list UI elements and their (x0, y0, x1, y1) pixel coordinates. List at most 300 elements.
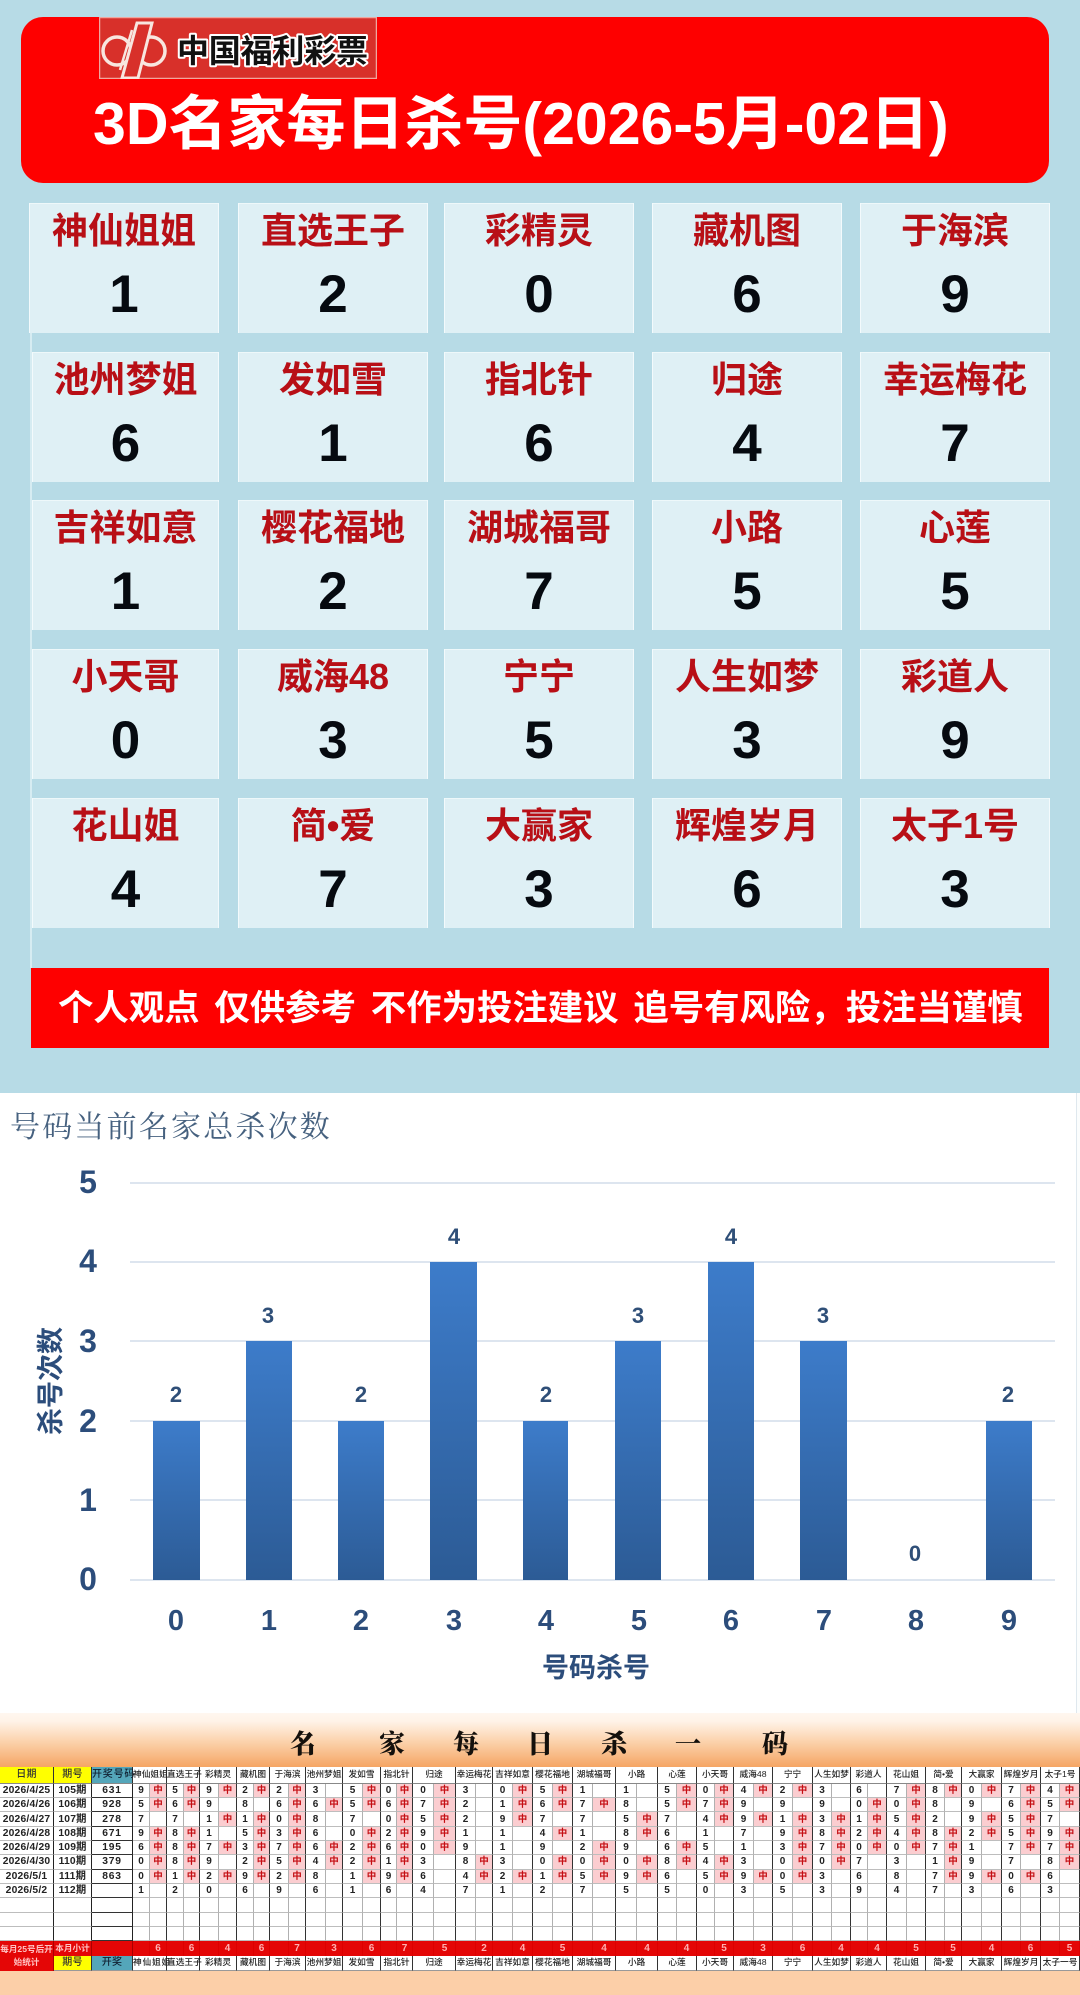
card: 大赢家 (444, 798, 634, 928)
bottom label row: 心莲 (668, 1957, 686, 1967)
row 105: 6 (856, 1785, 862, 1796)
row 111: 中 (187, 1871, 196, 1882)
card: 大赢家: 大赢家 (485, 805, 593, 846)
monthly subtotal row: 5 (442, 1943, 447, 1954)
header row: 樱花福地 (535, 1769, 570, 1779)
card: 宁宁: 宁宁 (503, 656, 575, 697)
row 107: 2026/4/27 (3, 1814, 50, 1824)
row 110: 8 (664, 1856, 670, 1867)
row 106: 5 (138, 1799, 144, 1810)
header row: 辉煌岁月 (1004, 1769, 1038, 1779)
row 105: 中 (719, 1785, 729, 1796)
card: 人生如梦: 3 (732, 711, 762, 770)
row 108: 2 (856, 1828, 862, 1839)
y axis labels: 1 (79, 1482, 97, 1518)
row 109: 中 (400, 1842, 409, 1853)
bar value labels: 0 (909, 1541, 921, 1566)
card: 发如雪: 发如雪 (279, 359, 387, 400)
card: 藏机图: 藏机图 (693, 210, 801, 251)
row 105: 4 (741, 1785, 746, 1796)
row 110: 3 (420, 1856, 426, 1867)
row 106: 8 (623, 1799, 629, 1810)
table heading: 杀 (601, 1725, 630, 1761)
row 105: 5 (540, 1785, 545, 1796)
row 107: 9 (969, 1814, 974, 1824)
row 108: 5 (242, 1828, 248, 1839)
row 108: 中 (987, 1828, 996, 1839)
row 106: 中 (872, 1799, 882, 1810)
x axis labels: 3 (446, 1605, 462, 1637)
row 109: 7 (819, 1842, 825, 1853)
monthly subtotal row: 6 (1028, 1943, 1033, 1954)
row 108: 1 (580, 1828, 585, 1839)
header row (0, 1767, 1080, 1971)
row 108: 9 (780, 1828, 785, 1839)
row 111: 中 (642, 1871, 652, 1882)
row 110: 8 (1047, 1856, 1053, 1867)
table section background (0, 1713, 1080, 1995)
row 106: 6 (172, 1799, 178, 1810)
row 108: 9 (420, 1828, 426, 1839)
row 109: 3 (780, 1842, 785, 1853)
bottom label row: 威海48 (739, 1957, 767, 1967)
row 107: 3 (819, 1814, 825, 1824)
row 110: 中 (948, 1856, 958, 1867)
row 110: 中 (187, 1856, 196, 1867)
card: 吉祥如意: 吉祥如意 (53, 507, 198, 548)
card: 樱花福地: 2 (318, 562, 348, 621)
bottom label row: 花山姐 (893, 1957, 919, 1967)
card: 小天哥 (32, 649, 219, 779)
row 106: 中 (1065, 1799, 1074, 1810)
row 110 (0, 1855, 1080, 1870)
row 111: 中 (479, 1871, 489, 1882)
decorative edge lines beside first column (30, 333, 32, 968)
card: 简•爱: 7 (318, 860, 348, 919)
row 106: 7 (420, 1799, 426, 1810)
row 105: 中 (798, 1785, 807, 1796)
header row: 人生如梦 (814, 1769, 849, 1779)
row 107: 中 (987, 1814, 996, 1824)
bottom label row: 彩精灵 (205, 1957, 231, 1967)
row 107: 278 (102, 1814, 122, 1824)
row 105: 中 (440, 1785, 449, 1796)
row 106: 9 (969, 1799, 974, 1810)
row 105: 1 (580, 1785, 585, 1796)
row 111: 1 (172, 1871, 178, 1882)
row 110: 中 (642, 1856, 652, 1867)
row 110: 中 (367, 1856, 376, 1867)
row 109: 6 (664, 1842, 670, 1853)
bottom label row: 指北针 (383, 1957, 410, 1967)
row 112: 3 (819, 1885, 825, 1896)
header row: 始统计 (14, 1957, 39, 1967)
card: 威海48 (238, 649, 428, 779)
card: 彩道人: 彩道人 (901, 656, 1009, 697)
row 106: 6 (540, 1799, 545, 1810)
row 109: 中 (1026, 1842, 1035, 1853)
row 109: 109期 (58, 1842, 87, 1853)
row 106: 中 (153, 1799, 163, 1810)
row 106: 106期 (58, 1799, 87, 1810)
row 105 (0, 1784, 1080, 1798)
header row: 指北针 (383, 1769, 410, 1779)
card: 小天哥: 小天哥 (71, 656, 180, 697)
header row: 期号 (62, 1769, 83, 1780)
row 108: 中 (872, 1828, 882, 1839)
row 108: 0 (350, 1828, 355, 1839)
row 106: 9 (780, 1799, 785, 1810)
row 107: 中 (257, 1814, 266, 1824)
row 111: 1 (540, 1871, 545, 1882)
row 106: 0 (856, 1799, 862, 1810)
row 111: 0 (138, 1871, 144, 1882)
x axis labels: 4 (538, 1605, 554, 1637)
monthly subtotal row: 5 (1067, 1943, 1072, 1954)
row 110: 中 (798, 1856, 807, 1867)
y axis title: 杀号次数 (36, 1327, 66, 1435)
row 108: 中 (1026, 1828, 1035, 1839)
row 107: 中 (518, 1814, 527, 1824)
row 106: 中 (682, 1799, 691, 1810)
card: 直选王子: 2 (318, 265, 348, 324)
row 105: 7 (894, 1785, 899, 1796)
row 108 (0, 1827, 1080, 1841)
row 105: 9 (138, 1785, 144, 1796)
row 107: 9 (500, 1814, 505, 1824)
row 110: 8 (463, 1856, 468, 1867)
row 110: 0 (780, 1856, 785, 1867)
row 109: 7 (1008, 1842, 1014, 1853)
monthly subtotal row: 5 (721, 1943, 727, 1954)
row 106: 5 (1047, 1799, 1053, 1810)
row 111: 6 (856, 1871, 862, 1882)
row 110: 3 (741, 1856, 746, 1867)
row 112: 2026/5/2 (6, 1885, 47, 1896)
row 108: 中 (558, 1828, 567, 1839)
row 110: 0 (819, 1856, 825, 1867)
card: 归途: 4 (732, 414, 762, 473)
table heading: 一 (675, 1725, 701, 1761)
row 106: 中 (599, 1799, 609, 1810)
row 106: 6 (386, 1799, 391, 1810)
x axis labels: 5 (631, 1605, 647, 1637)
row 105: 中 (758, 1785, 768, 1796)
row 111: 2 (276, 1871, 282, 1882)
row 107: 8 (313, 1814, 318, 1824)
row 109: 0 (894, 1842, 899, 1853)
row 109: 中 (836, 1842, 846, 1853)
card: 花山姐: 花山姐 (71, 805, 180, 846)
row 108: 8 (819, 1828, 825, 1839)
row 111: 863 (102, 1871, 122, 1882)
row 107: 107期 (58, 1814, 87, 1824)
row 110: 0 (540, 1856, 545, 1867)
row 105: 中 (558, 1785, 567, 1796)
monthly subtotal row: 7 (294, 1943, 300, 1954)
row 106: 6 (313, 1799, 318, 1810)
row 108: 671 (102, 1828, 122, 1839)
row 112: 3 (1047, 1885, 1053, 1896)
row 107: 中 (223, 1814, 232, 1824)
row 108: 2 (386, 1828, 391, 1839)
monthly subtotal row: 每月25号后开 (0, 1944, 53, 1954)
card: 宁宁: 5 (524, 711, 554, 770)
row 106: 中 (187, 1799, 196, 1810)
row 108: 4 (894, 1828, 899, 1839)
card grid (29, 203, 1050, 928)
row 110: 3 (894, 1856, 899, 1867)
card: 樱花福地: 樱花福地 (261, 507, 405, 548)
row 105: 7 (1008, 1785, 1014, 1796)
row 110: 2026/4/30 (3, 1856, 50, 1867)
row 105: 631 (102, 1785, 122, 1796)
row 112: 0 (703, 1885, 708, 1896)
monthly subtotal row: 4 (520, 1943, 525, 1954)
row 109 (0, 1841, 1080, 1855)
row 107: 1 (206, 1814, 212, 1824)
y axis labels: 3 (79, 1323, 97, 1359)
row 109: 9 (463, 1842, 468, 1853)
row 109: 中 (872, 1842, 882, 1853)
row 112: 7 (932, 1885, 938, 1896)
row 106: 中 (440, 1799, 449, 1810)
header banner (21, 17, 1049, 183)
header row: 宁宁 (784, 1769, 801, 1779)
row 110: 379 (102, 1856, 122, 1867)
card: 归途 (652, 352, 842, 482)
row 109: 9 (623, 1842, 629, 1853)
row 106: 7 (703, 1799, 708, 1810)
row 107: 中 (440, 1814, 449, 1824)
row 105: 5 (172, 1785, 178, 1796)
row 107: 1 (856, 1814, 862, 1824)
bar value labels: 3 (632, 1303, 644, 1328)
row 106: 中 (400, 1799, 409, 1810)
row 111: 中 (518, 1871, 527, 1882)
card: 藏机图 (652, 203, 842, 333)
bar value labels: 2 (355, 1382, 367, 1407)
row 108: 3 (276, 1828, 282, 1839)
row 108: 中 (367, 1828, 376, 1839)
row 111: 9 (741, 1871, 746, 1882)
row 112: 5 (623, 1885, 629, 1896)
y axis labels: 5 (79, 1164, 97, 1200)
row 108: 4 (540, 1828, 545, 1839)
row 105: 4 (1047, 1785, 1053, 1796)
bottom label row (54, 1956, 1080, 1971)
row 105: 中 (1026, 1785, 1035, 1796)
row 110: 7 (856, 1856, 862, 1867)
row 108: 8 (172, 1828, 178, 1839)
bar value labels (170, 1224, 1014, 1566)
bottom label row: 简•爱 (933, 1957, 954, 1967)
row 109: 7 (206, 1842, 212, 1853)
header row: 彩道人 (855, 1769, 882, 1779)
row 106: 9 (741, 1799, 746, 1810)
x axis title: 号码杀号 (542, 1653, 650, 1683)
row 109: 2026/4/29 (3, 1842, 50, 1853)
card: 大赢家: 3 (524, 860, 554, 919)
bar value labels: 2 (170, 1382, 182, 1407)
monthly subtotal row: 本月小计 (55, 1943, 90, 1953)
row 108: 2026/4/28 (3, 1828, 50, 1839)
row 111: 中 (223, 1871, 232, 1882)
header row: 神仙姐姐 (133, 1769, 168, 1779)
monthly subtotal row: 4 (684, 1943, 689, 1954)
bottom label row: 直选王子 (167, 1957, 202, 1967)
row 105: 中 (1065, 1785, 1074, 1796)
row 107: 7 (580, 1814, 585, 1824)
card: 小路 (652, 500, 842, 630)
monthly subtotal row: 6 (155, 1943, 161, 1954)
card: 太子1号: 太子1号 (891, 805, 1019, 846)
bottom label row: 樱花福地 (535, 1957, 570, 1967)
row 111: 中 (292, 1871, 302, 1882)
bar value labels: 2 (540, 1382, 552, 1407)
row 106: 中 (518, 1799, 527, 1810)
row 107: 0 (386, 1814, 391, 1824)
row 110: 1 (932, 1856, 938, 1867)
row 108: 中 (948, 1828, 958, 1839)
row 112: 6 (1008, 1885, 1014, 1896)
header row: 幸运梅花 (457, 1769, 491, 1779)
row 111: 中 (558, 1871, 567, 1882)
card: 藏机图: 6 (732, 265, 762, 324)
row 109: 中 (292, 1842, 302, 1853)
row 108: 6 (313, 1828, 318, 1839)
row 106: 8 (932, 1799, 938, 1810)
row 107 (0, 1812, 1080, 1827)
bar value labels: 4 (448, 1224, 461, 1249)
monthly subtotal row: 3 (760, 1943, 766, 1954)
row 111: 5 (703, 1871, 708, 1882)
table heading: 日 (527, 1725, 553, 1761)
blank rows (0, 1898, 1080, 1913)
row 106: 9 (819, 1799, 825, 1810)
card: 吉祥如意 (32, 500, 219, 630)
header row: 于海滨 (274, 1769, 301, 1779)
row 112: 5 (780, 1885, 785, 1896)
header row: 开奖号码 (92, 1769, 135, 1780)
row 107: 5 (623, 1814, 629, 1824)
x axis labels (168, 1605, 1017, 1637)
header row: 威海48 (739, 1769, 767, 1779)
row 105: 中 (948, 1785, 958, 1796)
row 105: 0 (969, 1785, 974, 1796)
bar value labels: 3 (262, 1303, 274, 1328)
row 108: 中 (1065, 1828, 1074, 1839)
row 108: 1 (463, 1828, 468, 1839)
card: 彩精灵 (444, 203, 634, 333)
row 106: 6 (276, 1799, 282, 1810)
row 112: 4 (894, 1885, 899, 1896)
row 107: 5 (894, 1814, 899, 1824)
row 112: 6 (386, 1885, 391, 1896)
monthly subtotal row: 6 (189, 1943, 194, 1954)
row 107: 7 (664, 1814, 670, 1824)
card: 樱花福地 (238, 500, 428, 630)
header row: 直选王子 (167, 1769, 202, 1779)
row 111: 6 (420, 1871, 426, 1882)
row 111: 4 (463, 1871, 468, 1882)
x axis labels: 1 (261, 1605, 277, 1637)
row 105: 0 (500, 1785, 505, 1796)
table heading: 每 (453, 1725, 479, 1761)
row 110: 1 (386, 1856, 391, 1867)
row 110: 9 (206, 1856, 212, 1867)
card: 简•爱: 简•爱 (291, 805, 375, 846)
row 111: 中 (798, 1871, 807, 1882)
card: 小天哥: 0 (111, 711, 140, 770)
row 109: 2 (350, 1842, 355, 1853)
row 111: 中 (1026, 1871, 1035, 1882)
row 108: 2 (969, 1828, 974, 1839)
chart title: 号码当前名家总杀次数 (10, 1102, 332, 1146)
row 110: 中 (682, 1856, 691, 1867)
row 105: 105期 (58, 1785, 87, 1796)
row 105: 0 (386, 1785, 391, 1796)
row 107: 中 (292, 1814, 302, 1824)
row 111: 2 (500, 1871, 505, 1882)
bottom label row: 神仙姐姐 (133, 1957, 171, 1967)
row 110: 4 (313, 1856, 318, 1867)
gridlines (130, 1183, 1055, 1580)
row 106: 中 (329, 1799, 339, 1810)
row 108: 中 (440, 1828, 449, 1839)
card: 直选王子: 直选王子 (261, 210, 405, 251)
bottom label row: 彩道人 (855, 1957, 882, 1967)
header row: 日期 (16, 1769, 37, 1780)
row 105: 2 (276, 1785, 282, 1796)
row 111: 8 (894, 1871, 899, 1882)
row 110: 8 (172, 1856, 178, 1867)
row 108: 中 (257, 1828, 266, 1839)
row 105: 中 (400, 1785, 409, 1796)
card: 花山姐 (32, 798, 219, 928)
monthly subtotal row: 5 (560, 1943, 565, 1954)
card: 幸运梅花: 7 (940, 414, 970, 473)
row 109: 7 (932, 1842, 938, 1853)
card: 小路: 5 (732, 562, 762, 621)
row 109: 2 (580, 1842, 585, 1853)
row 112: 7 (463, 1885, 468, 1896)
row 110: 7 (1008, 1856, 1014, 1867)
row 109: 中 (1065, 1842, 1074, 1853)
row 107: 7 (1047, 1814, 1053, 1824)
row 107: 4 (703, 1814, 708, 1824)
row 107: 1 (242, 1814, 248, 1824)
row 110: 中 (257, 1856, 266, 1867)
row 112: 4 (420, 1885, 426, 1896)
bottom label row: 归途 (425, 1957, 443, 1967)
bottom label row: 人生如梦 (814, 1957, 849, 1967)
monthly subtotal row: 5 (950, 1943, 956, 1954)
row 111: 8 (313, 1871, 318, 1882)
card: 人生如梦: 人生如梦 (675, 656, 819, 697)
row 110: 3 (500, 1856, 505, 1867)
card: 神仙姐姐 (29, 203, 219, 333)
bar value labels: 2 (1002, 1382, 1014, 1407)
card: 湖城福哥: 湖城福哥 (467, 507, 611, 548)
row 111: 9 (969, 1871, 974, 1882)
monthly subtotal row: 4 (225, 1943, 230, 1954)
logo: China Welfare Lottery: 中国福利彩票 (177, 33, 368, 69)
row 111: 中 (153, 1871, 163, 1882)
row 107: 5 (1008, 1814, 1014, 1824)
row 110: 2 (350, 1856, 355, 1867)
row 110: 中 (719, 1856, 729, 1867)
